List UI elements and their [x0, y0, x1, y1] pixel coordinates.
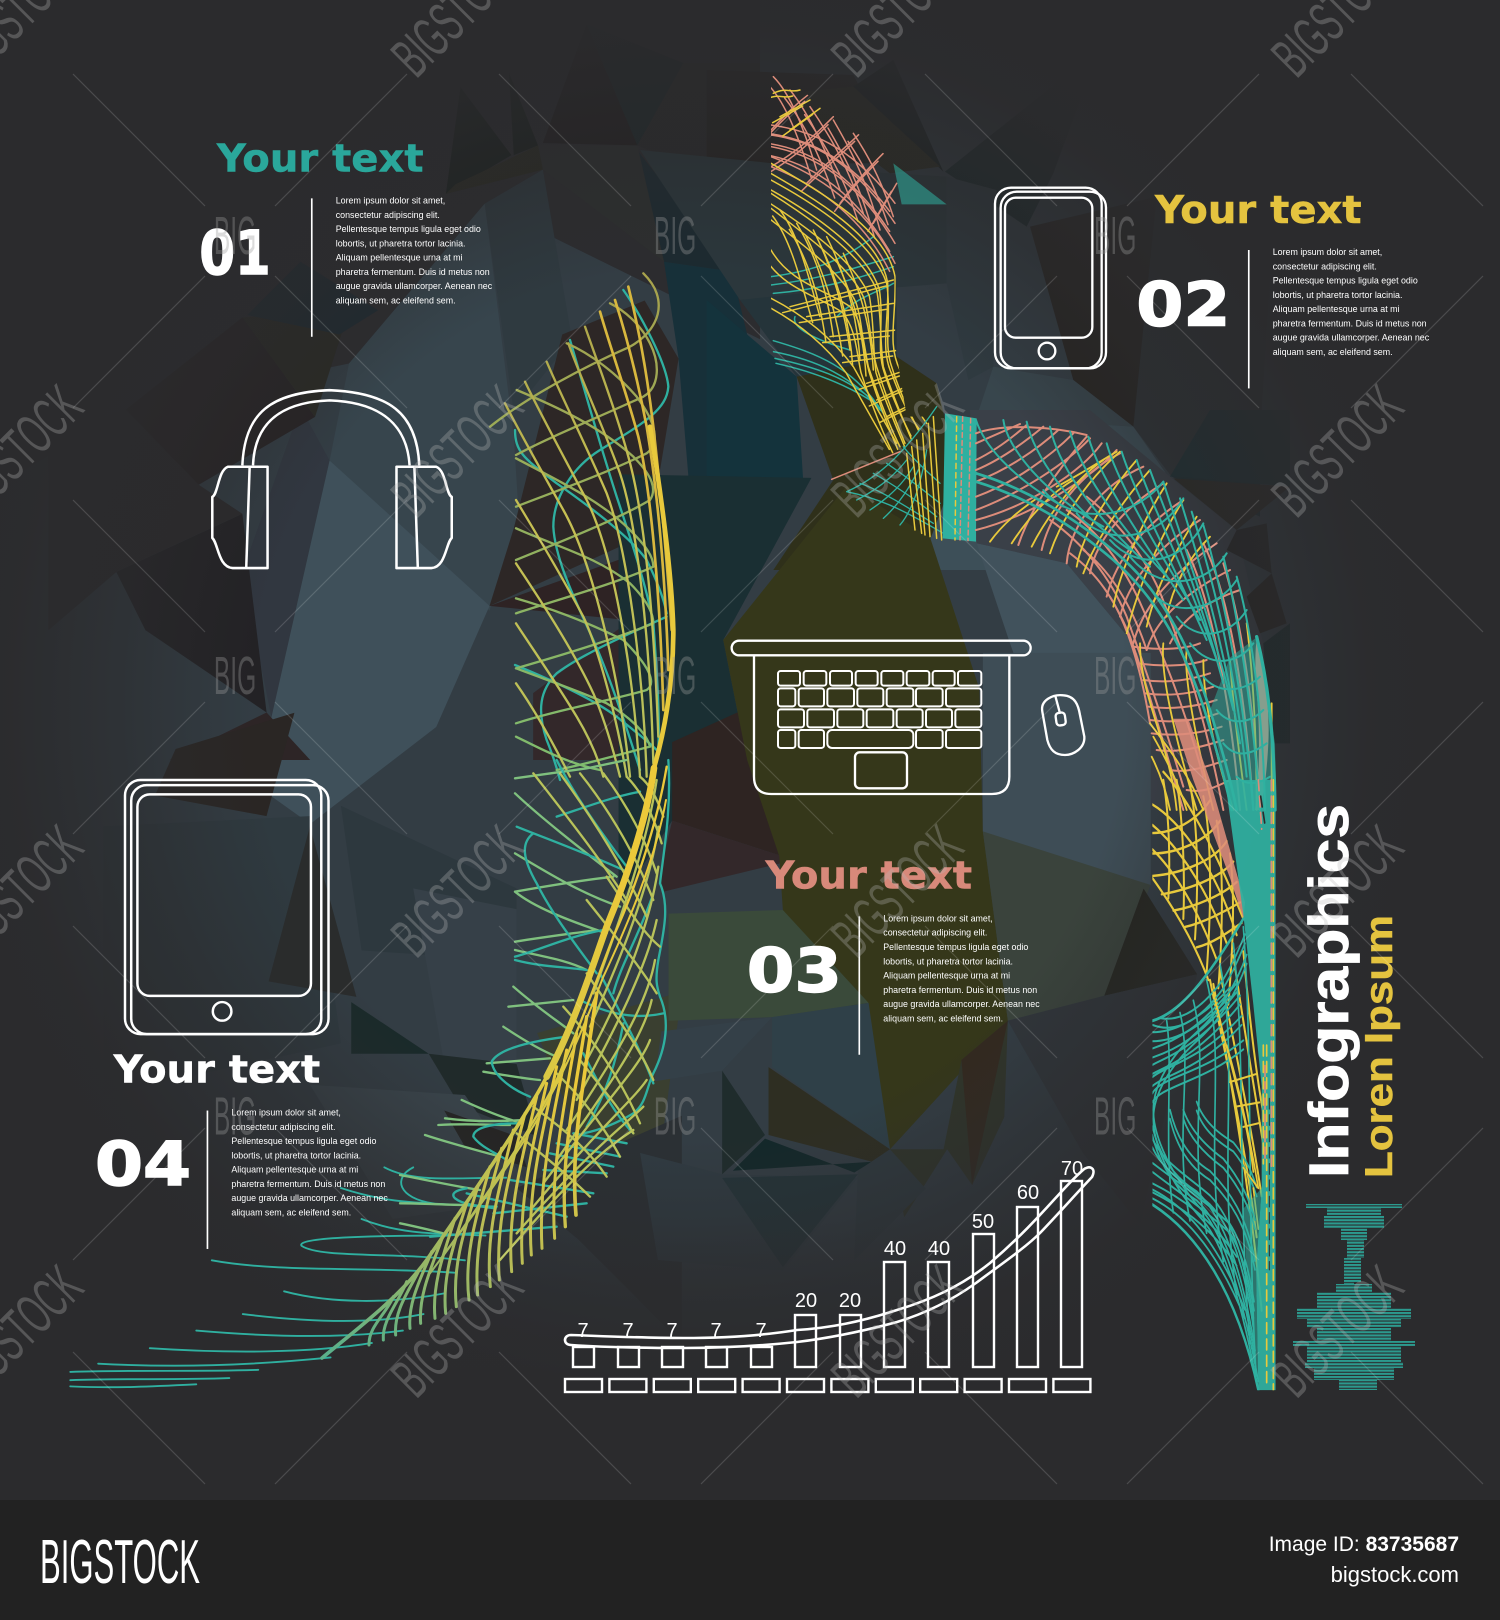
watermark BIGSTOCK: BIGSTOCK — [820, 1254, 975, 1409]
heading 01: Your text — [216, 137, 424, 181]
yellow grid — [1152, 772, 1267, 1311]
yellow vertical stripes in knot — [907, 417, 942, 540]
icon: tablet — [125, 780, 329, 1034]
body text 01: Pellentesque tempus ligula eget odio — [336, 224, 481, 234]
pink band — [1173, 719, 1245, 919]
yellow strands — [771, 90, 927, 447]
bar value labels: 40 — [928, 1238, 950, 1260]
body text 02: pharetra fermentum. Duis id metus non — [1273, 318, 1427, 328]
bar chart — [565, 1158, 1093, 1392]
teal strands — [771, 237, 893, 413]
polygons top centre — [640, 50, 1273, 570]
block 02 — [1136, 189, 1430, 388]
divider — [207, 1111, 208, 1249]
icon: mouse — [1042, 695, 1084, 755]
block 03 — [747, 854, 1040, 1055]
bar value labels: 7 — [755, 1320, 767, 1342]
body text 04: pharetra fermentum. Duis id metus non — [231, 1179, 385, 1189]
body text 03: pharetra fermentum. Duis id metus non — [883, 985, 1037, 995]
footer bar — [0, 1500, 1500, 1620]
watermark BIG: BIG — [214, 1086, 256, 1146]
watermark BIG: BIG — [654, 206, 696, 266]
pink strands — [771, 77, 897, 263]
pink edge — [1255, 640, 1269, 810]
lime network — [500, 773, 663, 1260]
bar value labels: 50 — [972, 1211, 994, 1233]
bar value labels: 60 — [1017, 1182, 1039, 1204]
polygons centre right — [970, 410, 1290, 843]
number 02: 02 — [1136, 269, 1230, 340]
watermark BIGSTOCK: BIGSTOCK — [820, 814, 975, 969]
divider — [311, 198, 313, 337]
yellow overlay strands — [1213, 992, 1260, 1229]
body text 04: Aliquam pellentesque urna at mi — [231, 1165, 358, 1175]
upper section: strands — [490, 273, 673, 780]
teal cap triangle — [893, 163, 947, 204]
number 03: 03 — [747, 936, 842, 1007]
heading 03: Your text — [764, 854, 972, 898]
far-left teal spirals — [70, 1167, 506, 1387]
right mesh: arc — [976, 420, 1275, 810]
body text 02: aliquam sem, ac eleifend sem. — [1273, 347, 1393, 357]
bar value labels: 40 — [884, 1238, 906, 1260]
keyboard keys — [778, 671, 981, 748]
watermark overlay: BIG — [1094, 646, 1136, 706]
body text 03: consectetur adipiscing elit. — [883, 928, 987, 938]
body text 01: consectetur adipiscing elit. — [336, 210, 440, 220]
solid teal waist band — [943, 413, 977, 542]
body text 03: aliquam sem, ac eleifend sem. — [883, 1013, 1003, 1023]
polygons lower centre — [619, 474, 1197, 1271]
body text 01: lobortis, ut pharetra tortor lacinia. — [336, 238, 465, 248]
body text 03: lobortis, ut pharetra tortor lacinia. — [883, 956, 1013, 966]
solid teal band — [1225, 780, 1276, 1390]
bar value labels: 7 — [577, 1320, 589, 1342]
body text 02: lobortis, ut pharetra tortor lacinia. — [1273, 290, 1402, 300]
body text 04: aliquam sem, ac eleifend sem. — [231, 1207, 351, 1217]
body text 04: Pellentesque tempus ligula eget odio — [231, 1136, 377, 1146]
yellow strands — [600, 287, 672, 710]
footer site: bigstock.com — [1331, 1562, 1459, 1587]
watermark BIG: BIG — [214, 646, 256, 706]
body text 02: augue gravida ullamcorper. Aenean nec — [1273, 333, 1430, 343]
green short strands — [400, 760, 627, 1233]
block 01 — [199, 137, 493, 337]
mesh strands — [764, 77, 927, 453]
teal bell — [1152, 919, 1258, 1390]
block 04 — [95, 1049, 388, 1249]
heading 04: Your text — [113, 1049, 320, 1093]
bar value labels: 70 — [1061, 1158, 1083, 1180]
watermark overlay: BIG — [1094, 206, 1136, 266]
bell waves — [1152, 934, 1258, 1390]
body text 03: Lorem ipsum dolor sit amet, — [883, 913, 993, 923]
body text 01: aliquam sem, ac eleifend sem. — [336, 295, 456, 305]
divider — [1248, 250, 1250, 388]
title: Infographics: Infographics — [1297, 804, 1360, 1178]
icon: sound wave — [1293, 1204, 1415, 1390]
icon: headphones — [212, 390, 452, 568]
long strands — [505, 327, 658, 777]
teal strands — [515, 290, 668, 780]
bar value labels: 20 — [839, 1290, 861, 1312]
body text 02: Aliquam pellentesque urna at mi — [1273, 304, 1400, 314]
pink fan — [976, 424, 1260, 810]
cross strands — [490, 273, 659, 770]
band stripes — [1258, 780, 1273, 1390]
baseline label boxes — [565, 1379, 1090, 1392]
body text 03: Pellentesque tempus ligula eget odio — [883, 942, 1028, 952]
polygons lower left — [103, 713, 682, 1343]
watermark BIG: BIG — [654, 646, 696, 706]
body text 02: Pellentesque tempus ligula eget odio — [1273, 276, 1418, 286]
bar value labels: 7 — [622, 1320, 634, 1342]
right mesh: descending section — [1152, 637, 1276, 1390]
icon: phone — [995, 188, 1106, 368]
bar value labels: 20 — [795, 1290, 817, 1312]
number 01: 01 — [199, 218, 271, 289]
ribs — [369, 993, 597, 1345]
teal strands — [976, 420, 1275, 810]
body text 04: Lorem ipsum dolor sit amet, — [231, 1108, 341, 1118]
body text 02: Lorem ipsum dolor sit amet, — [1273, 247, 1382, 257]
main band — [322, 767, 667, 1358]
teal band tapered top — [1210, 637, 1276, 780]
watermark BIG: BIG — [214, 206, 256, 266]
body text 02: consectetur adipiscing elit. — [1273, 261, 1377, 271]
polygons upper left — [0, 0, 760, 824]
teal network — [430, 760, 669, 1237]
body text 03: augue gravida ullamcorper. Aenean nec — [883, 999, 1040, 1009]
watermark BIGSTOCK: BIGSTOCK — [380, 374, 535, 529]
body text 04: augue gravida ullamcorper. Aenean nec — [231, 1193, 388, 1203]
body text 01: augue gravida ullamcorper. Aenean nec — [336, 281, 493, 291]
body text 04: consectetur adipiscing elit. — [231, 1122, 335, 1132]
bars — [573, 1181, 1082, 1367]
watermark overlay: BIG — [1094, 1086, 1136, 1146]
watermark BIG — [214, 206, 1136, 1146]
body text 03: Aliquam pellentesque urna at mi — [883, 971, 1010, 981]
body text 04: lobortis, ut pharetra tortor lacinia. — [231, 1150, 361, 1160]
subtitle: Loren Ipsum: Loren Ipsum — [1358, 915, 1401, 1178]
footer image id: Image ID: 83735687 — [1269, 1533, 1459, 1556]
watermark BIGSTOCK: BIGSTOCK — [380, 1254, 535, 1409]
footer logo: BIGSTOCK — [40, 1528, 200, 1597]
watermark BIGSTOCK: BIGSTOCK — [820, 374, 975, 529]
number 04: 04 — [95, 1129, 191, 1200]
icon: laptop — [732, 641, 1031, 794]
lower section: strands — [322, 760, 669, 1358]
trend arrow curve — [565, 1167, 1093, 1348]
body text 01: Lorem ipsum dolor sit amet, — [336, 196, 445, 206]
heading 02: Your text — [1154, 189, 1362, 233]
body text 01: pharetra fermentum. Duis id metus non — [336, 267, 490, 277]
left mesh ribbon — [70, 273, 673, 1387]
bar value labels: 7 — [710, 1320, 722, 1342]
yellow strands — [990, 452, 1272, 810]
watermark BIG: BIG — [654, 1086, 696, 1146]
divider — [858, 916, 860, 1055]
bar value labels — [577, 1158, 1083, 1342]
lower knot teal mesh — [847, 407, 943, 533]
right mesh: top section and waist — [764, 77, 977, 542]
body text 01: Aliquam pellentesque urna at mi — [336, 253, 463, 263]
watermark BIGSTOCK: BIGSTOCK — [380, 814, 535, 969]
vertical title — [1297, 804, 1401, 1178]
bar value labels: 7 — [666, 1320, 678, 1342]
